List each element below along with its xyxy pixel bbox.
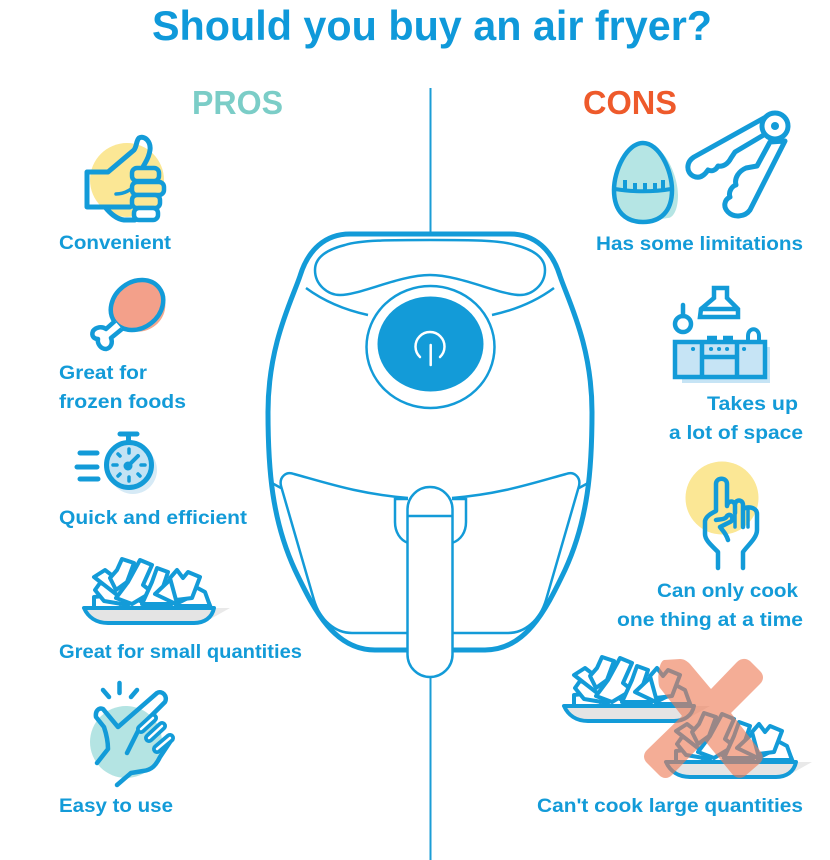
title: Should you buy an air fryer? [152, 2, 712, 49]
basket side lines [270, 482, 590, 488]
handle [408, 487, 452, 677]
pro: easy to use [59, 683, 173, 817]
icon: kitchen [675, 288, 770, 383]
pro: small quantities [59, 559, 302, 663]
con: has some limitations [596, 113, 803, 255]
icon: fries plate [84, 559, 230, 624]
icon: fries plate left [564, 657, 710, 722]
label: Great for small quantities [59, 641, 302, 663]
label: Takes up [707, 393, 798, 415]
heading: pros: PROS [192, 84, 283, 121]
label: Can only cook [657, 580, 798, 602]
shoulder lines [306, 288, 554, 315]
icon: one finger hand [686, 462, 758, 568]
power symbol [416, 332, 445, 365]
label: frozen foods [59, 391, 186, 413]
label: a lot of space [669, 422, 803, 444]
label: Great for [59, 362, 147, 384]
pro: convenient [59, 137, 172, 254]
pro: frozen foods [59, 270, 186, 413]
icon: tongs [688, 113, 788, 216]
con: large quantities [564, 657, 812, 778]
icon: egg timer [614, 143, 678, 222]
label: Has some limitations [596, 233, 803, 255]
handle brackets [395, 499, 466, 543]
label: large quantities: Can't cook large quantities [537, 795, 803, 817]
label [669, 393, 803, 444]
icon: pressing hand [90, 683, 170, 785]
center divider line [430, 88, 432, 860]
label [617, 580, 803, 631]
label: Quick and efficient [59, 507, 248, 529]
label [59, 362, 186, 413]
icon: thumbs up [87, 137, 164, 220]
pro: quick and efficient [59, 434, 248, 529]
con: takes up space [669, 288, 803, 444]
handle cap line [408, 515, 452, 517]
icon: fries plate right [666, 713, 812, 778]
basket [281, 473, 579, 633]
label: Convenient [59, 232, 172, 254]
fryer body [268, 234, 592, 650]
control dial ring [366, 286, 494, 408]
label: one thing at a time [617, 609, 803, 631]
con: one thing at a time [617, 462, 803, 631]
icon: chicken leg [92, 270, 175, 349]
top grip [315, 240, 545, 295]
heading: cons: CONS [583, 84, 677, 121]
icon: red cross [644, 659, 763, 778]
air fryer illustration [268, 234, 592, 677]
power button [378, 296, 484, 392]
icon: stopwatch [77, 434, 157, 494]
label: Easy to use [59, 795, 173, 817]
